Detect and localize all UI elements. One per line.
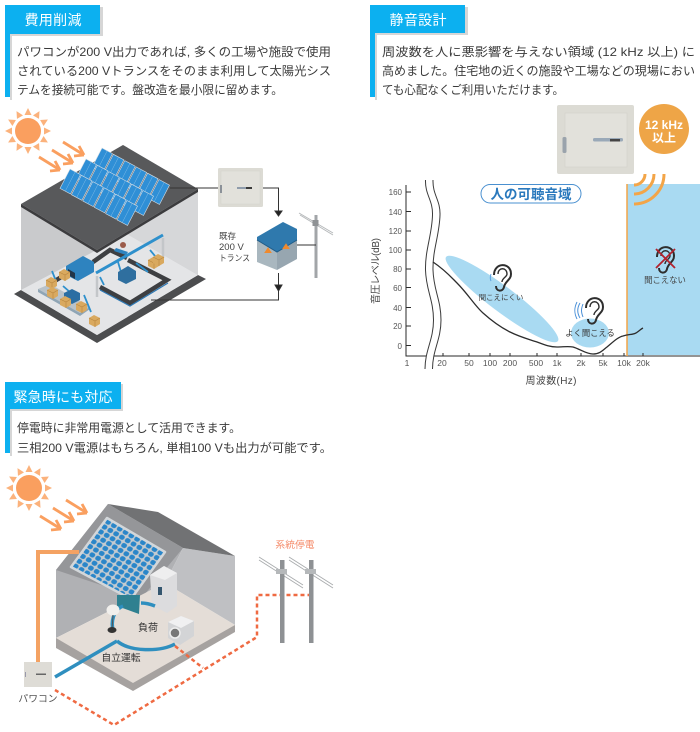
storage cabinet <box>150 566 177 613</box>
label: existing transformer: トランス <box>219 253 250 263</box>
badge: 12 kHz and above: 以上 <box>652 131 676 145</box>
label: existing transformer <box>219 231 250 263</box>
x axis labels <box>405 358 651 368</box>
ellipse: easy to hear <box>571 318 609 348</box>
x axis labels: 100 <box>483 358 497 368</box>
text block: cost reduction: テムを接続可能です。盤改造を最小限に留めます。 <box>17 82 283 97</box>
icon: sound waves <box>634 174 664 204</box>
dashed outage line <box>55 595 310 725</box>
x axis labels: 1k <box>553 358 562 368</box>
icon: sun top <box>5 108 51 154</box>
x axis labels: 500 <box>529 358 543 368</box>
icon: ear easy to hear <box>575 298 603 324</box>
panel: cost reduction heading <box>5 5 103 36</box>
ellipse: hard to hear <box>439 247 565 351</box>
text block: quiet design: 周波数を人に悪影響を与えない領域 (12 kHz 以上) に <box>382 44 695 59</box>
y axis labels: 160 <box>389 188 403 197</box>
panel: quiet design heading <box>370 5 468 35</box>
badge: 12 kHz and above <box>639 104 689 154</box>
y axis labels: 100 <box>389 246 403 255</box>
text block: emergency <box>17 421 332 455</box>
text block: cost reduction <box>17 44 331 97</box>
icon: sunlight arrows top <box>39 142 84 171</box>
label: inaudible: 聞こえない <box>644 275 686 285</box>
orange power line <box>38 552 79 662</box>
text block: cost reduction: されている200 Vトランスをそのまま利用して太陽光シス <box>17 63 331 78</box>
washing machine <box>168 616 194 645</box>
panel: emergency heading <box>5 382 123 411</box>
y axis labels: 80 <box>393 265 403 274</box>
y axis title: 音圧レベル(dB) <box>369 238 382 304</box>
power conditioner box <box>218 168 263 207</box>
threshold line <box>626 184 628 356</box>
icon: ear hard to hear <box>490 265 511 291</box>
title pill <box>481 184 581 203</box>
x axis labels: 5k <box>599 358 608 368</box>
teal panel stand <box>117 595 140 614</box>
connection lines: factory to transformer <box>151 188 282 300</box>
panel: quiet design heading: 静音設計 <box>390 12 446 28</box>
icon: sun bottom <box>6 465 52 511</box>
x axis labels: 20k <box>636 358 651 368</box>
label: self-sustained operation: 自立運転 <box>101 651 141 664</box>
solar array <box>71 518 165 599</box>
self-sustained circuit <box>55 603 175 677</box>
solar panels on roof <box>60 148 170 226</box>
text block: emergency: 三相200 V電源はもちろん, 単相100 Vも出力が可能です。 <box>17 440 332 455</box>
y axis labels: 20 <box>393 322 403 331</box>
x axis labels: 10k <box>617 358 632 368</box>
x axis labels: 1 <box>405 358 410 368</box>
icon: sunlight arrows bottom <box>40 500 87 530</box>
text block: quiet design: ても心配なくご利用いただけます。 <box>382 82 564 97</box>
y axis labels <box>389 188 403 351</box>
y axis labels: 140 <box>389 208 403 217</box>
axes <box>406 185 700 356</box>
label: grid outage: 系統停電 <box>275 538 315 551</box>
inaudible zone <box>627 184 700 355</box>
accent bar: cost reduction <box>5 34 12 100</box>
label: power conditioner: パワコン <box>18 693 58 705</box>
x axis labels: 2k <box>577 358 586 368</box>
y axis labels: 40 <box>393 304 403 313</box>
y axis labels: 120 <box>389 227 403 236</box>
label: easy to hear: よく聞こえる <box>565 328 615 338</box>
utility poles <box>259 557 333 643</box>
label: existing transformer: 200 V <box>219 242 244 253</box>
text block: quiet design: 高めました。住宅地の近くの施設や工場などの現場におい <box>382 64 695 78</box>
factory illustration <box>14 145 206 343</box>
chart: audible range <box>369 174 700 387</box>
x axis title: 周波数(Hz) <box>526 374 576 387</box>
factory machinery <box>38 235 168 327</box>
label: load: 負荷 <box>138 622 158 634</box>
axis break <box>425 180 441 369</box>
hearing threshold curve <box>433 262 643 354</box>
utility pole <box>297 213 333 278</box>
x axis labels: 20 <box>437 358 447 368</box>
y axis labels: 0 <box>398 342 403 351</box>
text block: quiet design <box>382 44 695 97</box>
text block: cost reduction: パワコンが200 V出力であれば, 多くの工場や施設で使用 <box>17 44 331 59</box>
house illustration <box>55 504 235 691</box>
badge: 12 kHz and above: 12 kHz <box>645 118 683 132</box>
label: hard to hear: 聞こえにくい <box>479 293 523 302</box>
lamp <box>106 604 120 633</box>
x axis labels: 50 <box>464 358 474 368</box>
title pill: 人の可聴音域 <box>490 186 572 202</box>
accent bar: emergency <box>5 409 12 456</box>
x axis labels: 200 <box>503 358 517 368</box>
small power conditioner <box>24 662 52 687</box>
product photo: power conditioner <box>557 105 634 174</box>
label: existing transformer: 既存 <box>219 231 237 241</box>
y axis labels: 60 <box>393 284 403 293</box>
text block: emergency: 停電時に非常用電源として活用できます。 <box>17 421 241 435</box>
transformer <box>257 222 297 270</box>
icon: crossed ear <box>656 247 675 273</box>
panel: emergency heading: 緊急時にも対応 <box>14 389 112 405</box>
accent bar: quiet design <box>370 33 377 100</box>
panel: cost reduction heading: 費用削減 <box>24 12 82 28</box>
